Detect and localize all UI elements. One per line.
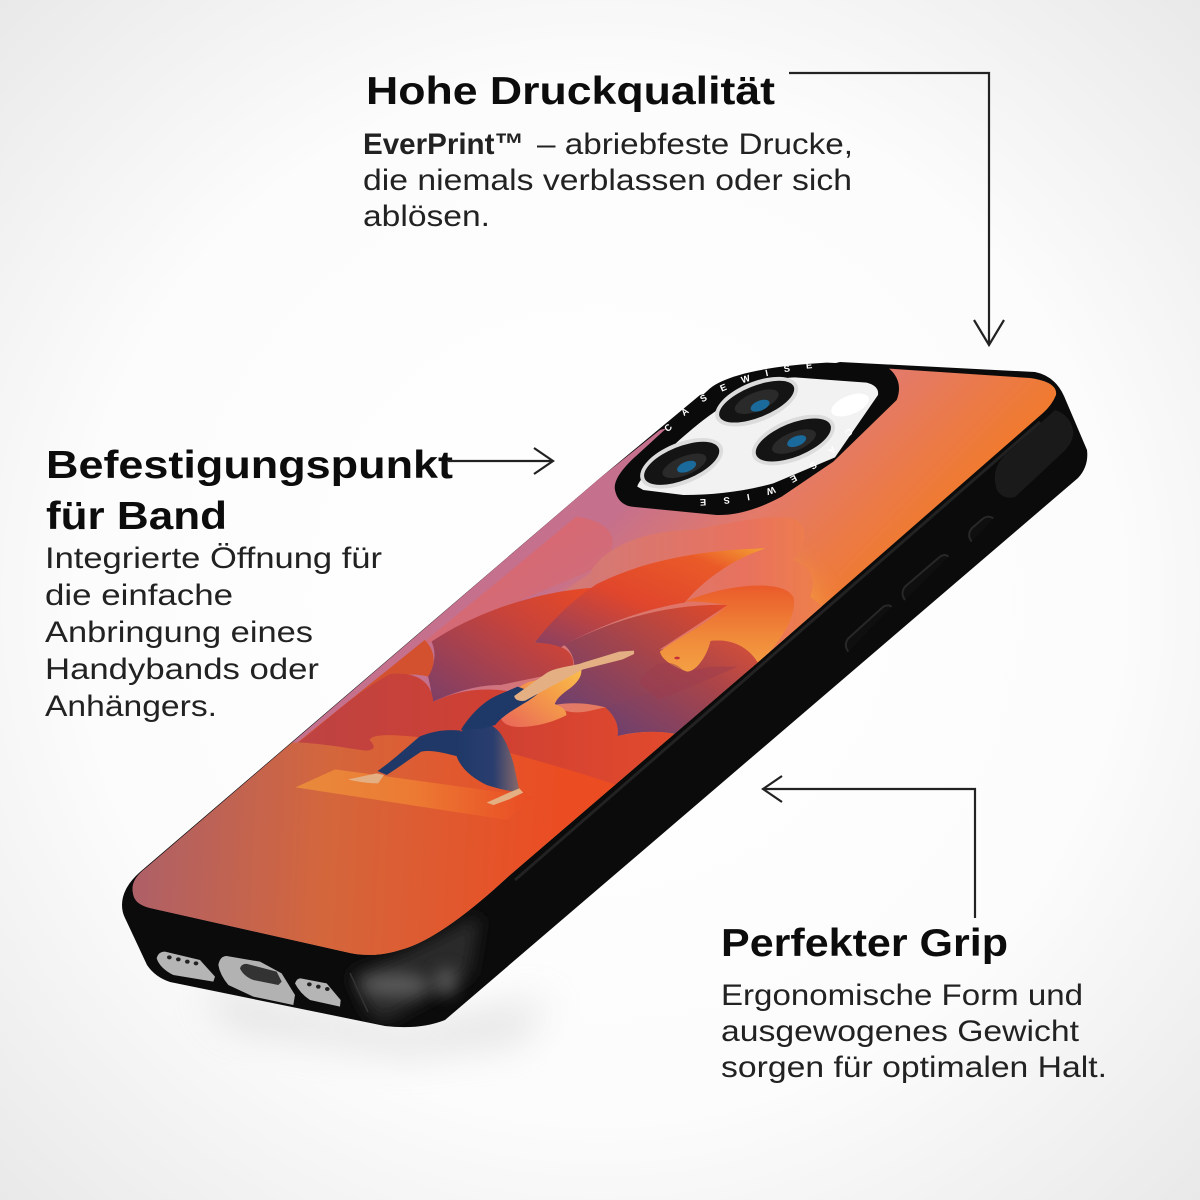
- hair: [500, 665, 581, 727]
- yoga mat: [296, 770, 491, 817]
- torso: [461, 687, 538, 730]
- artwork warm glow: [759, 574, 830, 662]
- left orange cloud: [298, 640, 434, 742]
- lens left: [633, 428, 730, 499]
- illustration: [73, 517, 828, 1010]
- mute switch: [969, 517, 993, 542]
- phone case: [122, 362, 1088, 1028]
- side grip patch: [995, 410, 1073, 498]
- dark inner wing: [669, 663, 738, 678]
- volume up: [902, 555, 948, 600]
- case rim highlight: [515, 422, 1040, 880]
- pink cloud: [425, 517, 613, 643]
- text block: strap attachment: Integrierte Öffnung für: [45, 542, 382, 575]
- side buttons: [846, 517, 993, 652]
- text block: EverPrint: [363, 128, 853, 233]
- text block: strap attachment: [45, 542, 382, 723]
- back leg: [377, 730, 461, 775]
- lower red cloud: [297, 674, 678, 790]
- snake eye: [674, 657, 680, 659]
- ring lettering upper: CASEWISE: [664, 364, 812, 431]
- red fan left: [428, 587, 605, 702]
- arm: [514, 651, 634, 701]
- text block: EverPrint: EverPrint™: [363, 128, 524, 161]
- orange floor: [132, 735, 616, 955]
- camera ring: [615, 363, 899, 515]
- lower wing: [605, 641, 759, 736]
- speaker left: [157, 952, 215, 982]
- text block: EverPrint: die niemals verblassen oder sich: [363, 164, 852, 197]
- camera plate: [637, 377, 878, 495]
- speaker right holes: [307, 982, 330, 991]
- lens right: [745, 404, 842, 476]
- text block: EverPrint: ablösen.: [363, 200, 490, 233]
- text block: EverPrint: – abriebfeste Drucke,: [537, 128, 853, 161]
- charging port: [218, 956, 295, 1005]
- heading: Hohe Druckqualität: Hohe Druckqualität: [366, 70, 775, 113]
- bottom ports: [157, 952, 341, 1007]
- lens top: [708, 367, 805, 437]
- front leg and hip: [455, 724, 520, 792]
- speaker left holes: [167, 955, 198, 965]
- heading: Perfekter Grip: Perfekter Grip: [721, 922, 1008, 965]
- volume down: [846, 605, 892, 652]
- figure: [348, 651, 634, 805]
- heading: Befestigungspunkt: [46, 444, 453, 538]
- arrow: strap attachment: [448, 448, 553, 474]
- camera island: [614, 362, 899, 515]
- arrow: grip: [763, 776, 975, 918]
- artwork upper gradient: [132, 368, 1056, 955]
- text block: strap attachment: Anhängers.: [45, 690, 217, 723]
- ring lettering lower: CASEWISE: [700, 429, 852, 506]
- text block: grip: Ergonomische Form und: [721, 979, 1083, 1012]
- red fan top: [535, 548, 766, 647]
- arrow: print quality: [789, 73, 1004, 345]
- snake head: [660, 585, 794, 672]
- speaker right: [295, 978, 341, 1007]
- text block: strap attachment: Anbringung eines: [45, 616, 313, 649]
- phone drop shadow: [200, 985, 550, 1055]
- heading: Befestigungspunkt: Befestigungspunkt: [46, 444, 453, 487]
- printed artwork: [132, 368, 1056, 955]
- front foot: [487, 788, 523, 805]
- text block: strap attachment: Handybands oder: [45, 653, 319, 686]
- text block: grip: sorgen für optimalen Halt.: [721, 1051, 1107, 1084]
- case body: [122, 362, 1087, 1027]
- peach cloud: [556, 517, 828, 670]
- case corner gloss: [350, 915, 480, 1022]
- text block: grip: ausgewogenes Gewicht: [721, 1015, 1080, 1048]
- purple fan: [554, 605, 759, 736]
- charging slot: [240, 964, 282, 985]
- flash: [828, 389, 872, 421]
- text block: grip: [721, 979, 1107, 1084]
- text block: strap attachment: die einfache: [45, 579, 233, 612]
- back foot: [348, 773, 384, 783]
- heading: Befestigungspunkt: für Band: [46, 495, 227, 538]
